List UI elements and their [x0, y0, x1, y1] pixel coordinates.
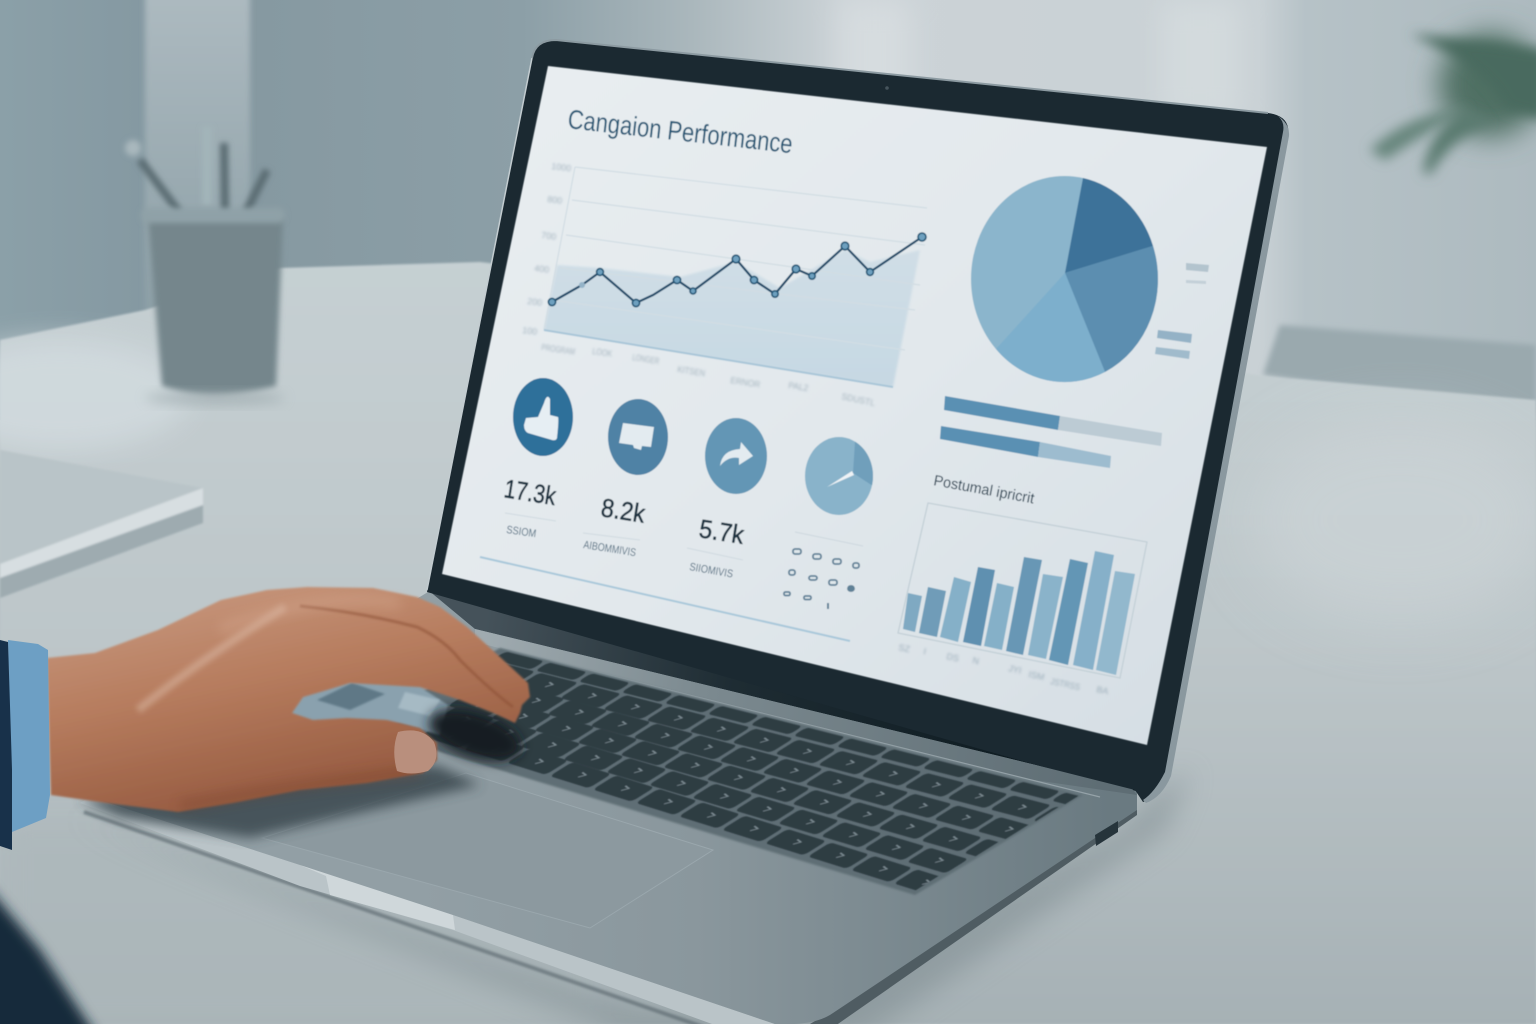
bar chart heading: Postumal ipricrit [932, 472, 1036, 508]
value: 8.2k [599, 492, 648, 529]
hinge band [428, 590, 1150, 792]
axis labels: LONGER [632, 352, 660, 366]
axis labels: 100 [522, 325, 538, 337]
icon: share arrow [705, 418, 767, 494]
axis labels: 200 [527, 296, 543, 308]
metric: comments [583, 399, 668, 559]
laptop shadow on desk [70, 770, 1190, 1024]
background wall [0, 0, 1536, 420]
screen footer line [480, 557, 850, 641]
axis labels: 1000 [551, 161, 572, 173]
bar chart axis labels: N [972, 655, 980, 666]
axis labels: LOOK [592, 346, 613, 359]
value: 5.7k [697, 513, 747, 550]
laptop base [80, 590, 1150, 1024]
desk surface [0, 262, 1536, 1024]
finger crease [300, 606, 513, 707]
metric: shares [687, 418, 767, 581]
axis labels: PROGRAM [541, 342, 576, 357]
bar chart axis labels: I [923, 646, 927, 656]
keyboard well [372, 648, 1083, 895]
icon: comment bubble [608, 399, 668, 475]
small icon grid [784, 532, 863, 609]
axis labels: KITSEN [677, 364, 706, 378]
axis labels: 700 [541, 230, 557, 242]
data points [548, 233, 926, 307]
axis labels: SDUSTL [841, 391, 876, 408]
value: 17.3k [502, 473, 559, 511]
title: Cangaion Performance [566, 104, 794, 159]
deck surface [90, 592, 1150, 1024]
pencil cup [125, 127, 285, 405]
metric: likes [502, 378, 573, 540]
bar chart [898, 503, 1147, 696]
bar chart axis labels: BA [1096, 684, 1109, 696]
notebook [0, 450, 203, 598]
windowsill band behind desk [1263, 325, 1536, 412]
thumb shading [180, 772, 420, 806]
label: SSIOM [506, 524, 537, 540]
label: SIIOMIVIS [688, 561, 734, 581]
hand [47, 587, 530, 812]
pie legend marks [1155, 263, 1209, 359]
laptop screen dashboard [442, 66, 1267, 745]
bar chart axis labels: JSTRSS [1050, 676, 1081, 692]
keyboard area seen under the hand [80, 681, 527, 838]
blurred jacket corner [0, 878, 99, 1024]
thumbnail [394, 730, 436, 774]
area fill [544, 250, 920, 387]
axis labels [522, 161, 876, 408]
bar chart axis labels: JYI [1008, 663, 1022, 676]
icon: thumbs up [513, 378, 573, 456]
progress bars [940, 396, 1162, 468]
axis labels: 400 [534, 263, 550, 275]
shirt cuff and sleeve [0, 640, 50, 850]
right side edge [800, 800, 1137, 1024]
trend line [552, 237, 922, 303]
blurred plant [1370, 33, 1536, 175]
bar chart axis labels: ISM [1028, 669, 1045, 682]
pie chart [971, 176, 1158, 382]
bar chart axis labels: DS [946, 651, 960, 664]
webcam [885, 86, 889, 90]
label: AIBOMMIVIS [583, 539, 637, 559]
bar chart axis labels: SZ [898, 642, 911, 654]
line chart panel [522, 161, 927, 408]
front lip [84, 812, 712, 1024]
back of hand highlights [138, 607, 285, 710]
bar chart axis labels [898, 642, 1109, 696]
axis labels: ERNOR [730, 375, 761, 390]
axis labels: PAL2 [788, 380, 809, 393]
axis labels: 800 [547, 194, 563, 206]
trackpad [262, 773, 713, 928]
side port [1095, 821, 1118, 846]
laptop lid [427, 40, 1289, 803]
metric: clock pie icon [805, 437, 873, 515]
keyboard keys [417, 650, 1080, 891]
